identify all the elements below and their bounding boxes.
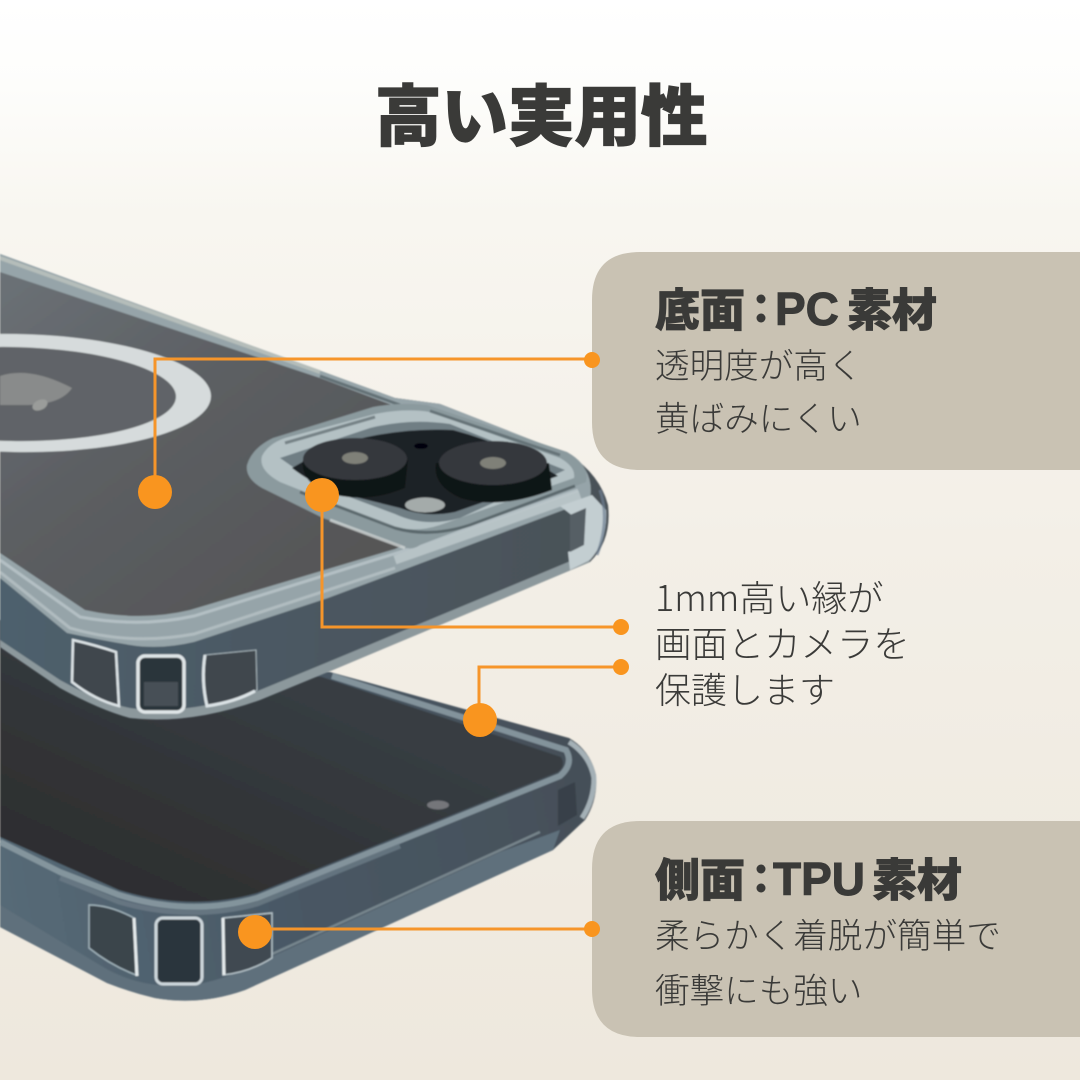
panel heading: 底面 [655,274,745,339]
text block: raised edge note: 画面とカメラを [655,616,910,668]
callout: bottom material leader [138,352,600,509]
panel heading [655,844,962,909]
microphone hole [414,443,428,449]
panel heading [655,274,937,339]
top phone case (back view) [0,254,609,720]
bump clear frame [247,404,587,548]
magsafe ring [0,331,212,455]
top phone side button recesses [72,640,257,712]
bump lower rim reflections [300,486,575,532]
panel: bottom material [592,252,1080,470]
top phone bottom edge glass [0,555,590,720]
camera recess [292,430,558,514]
text block: raised edge note: 保護します [655,662,835,714]
bottom phone case (front view) [0,620,596,1001]
lower rim highlights [0,490,578,622]
panel body text [655,338,862,441]
callout: screen edge leader [463,659,629,737]
panel body text: 黄ばみにくい [655,391,862,441]
panel heading: 素材 [872,844,962,909]
bottom phone camera hole [427,800,449,810]
bottom phone screen rim [0,676,569,907]
panel heading: PC [775,283,839,335]
panel body text [655,908,1001,1013]
panel heading: 側面 [655,844,745,909]
panel body text: 柔らかく着脱が簡単で [655,908,1001,958]
left lens [303,438,408,498]
callout: camera edge leader [305,478,629,635]
bottom phone lower rim [0,830,560,1001]
camera bump [247,404,587,548]
panel body text: 衝撃にも強い [655,963,862,1013]
bottom phone corner highlight [569,742,594,818]
bottom phone screen [0,620,563,902]
panel body text: 透明度が高く [655,338,862,388]
flash [405,498,445,512]
top phone rim [0,254,591,647]
callout: side material leader [238,915,600,949]
top phone back panel [0,272,560,616]
text block: raised edge note [655,570,910,714]
top rim highlight [0,258,320,372]
panel heading: TPU [773,853,865,905]
apple logo [0,373,72,413]
right lens [436,441,552,502]
bottom phone silhouette [0,620,596,1001]
side band corner glass [560,495,606,570]
text block: raised edge note: 1mm高い縁が [655,570,883,622]
top phone silhouette [0,254,609,720]
bottom phone side button recesses [89,905,272,984]
panel heading: 素材 [847,274,937,339]
panel: side material [592,821,1080,1037]
title: 高い実用性 [375,64,708,160]
